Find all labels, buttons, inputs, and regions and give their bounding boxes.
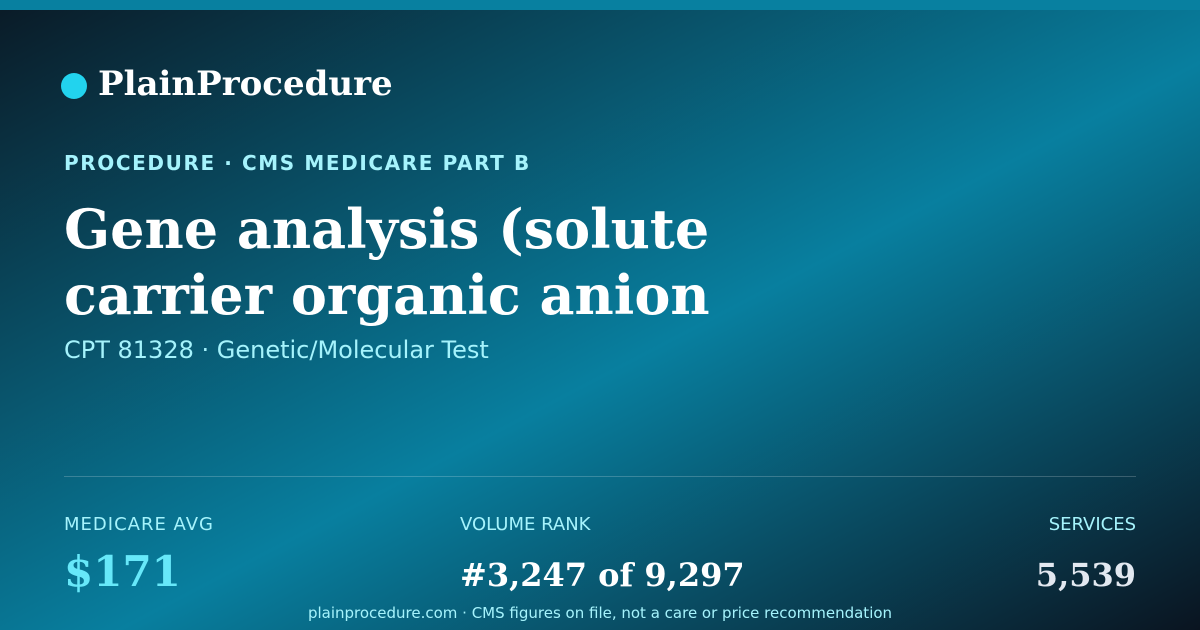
divider <box>64 476 1136 477</box>
subtitle: CPT 81328 · Genetic/Molecular Test <box>64 336 489 364</box>
stat value: #3,247 of 9,297 <box>460 556 745 594</box>
stat value: $171 <box>64 547 181 596</box>
stat label: VOLUME RANK <box>460 514 590 535</box>
stat: medicare average <box>64 514 214 596</box>
stat label: SERVICES <box>1049 514 1136 535</box>
logo <box>61 64 393 104</box>
footer note: plainprocedure.com · CMS figures on file, not a care or price recommendation <box>308 604 892 622</box>
stat value: 5,539 <box>1036 556 1136 594</box>
icon: logo dot <box>61 73 87 99</box>
stat: volume rank <box>460 514 745 594</box>
title <box>64 197 710 327</box>
top accent bar <box>0 0 1200 10</box>
brand name: PlainProcedure <box>98 64 393 104</box>
title: Gene analysis (solute <box>64 197 709 261</box>
title: carrier organic anion <box>64 263 710 327</box>
stat label: MEDICARE AVG <box>64 514 214 535</box>
stat: services <box>1036 514 1136 594</box>
eyebrow label: PROCEDURE · CMS MEDICARE PART B <box>64 151 531 175</box>
